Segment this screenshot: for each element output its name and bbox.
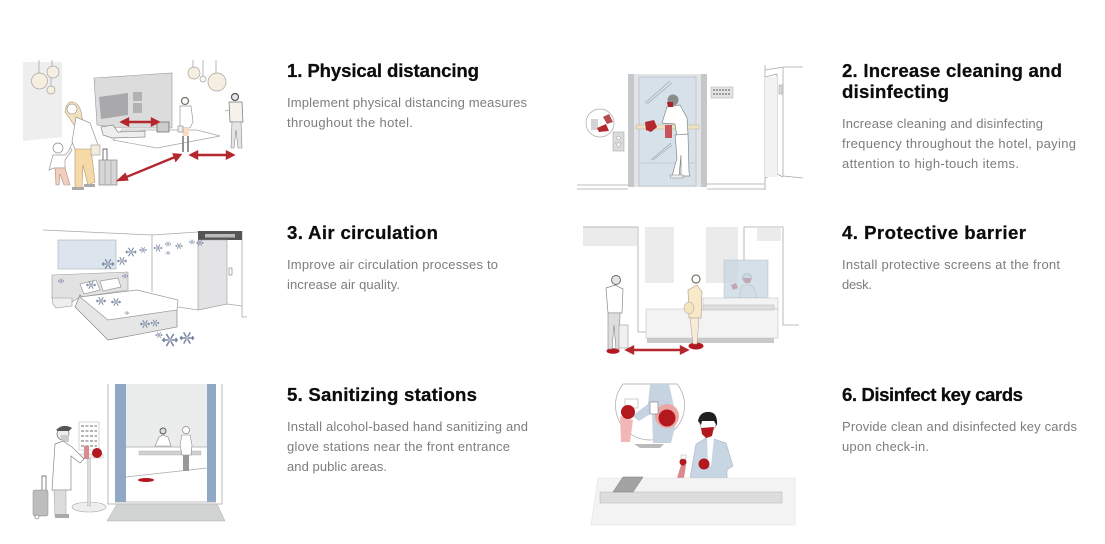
heading: 1. Physical distancing bbox=[287, 60, 479, 81]
sanitizer stand bbox=[72, 422, 106, 512]
cleaner figure bbox=[645, 94, 690, 178]
description: and public areas. bbox=[287, 459, 387, 474]
key card reader bbox=[613, 477, 643, 492]
magnifier circle: hands and key card bbox=[616, 384, 684, 448]
description bbox=[842, 257, 1060, 292]
red distance arrow bbox=[627, 347, 687, 353]
man with suitcase on marker bbox=[606, 276, 628, 354]
panel: disinfect key cards bbox=[591, 384, 1078, 525]
panel: air circulation bbox=[43, 222, 498, 346]
description bbox=[842, 116, 1076, 171]
illustration: man disinfecting key card at counter bbox=[591, 384, 795, 525]
description: upon check-in. bbox=[842, 439, 929, 454]
description: Install protective screens at the front bbox=[842, 257, 1060, 272]
panel: protective barrier bbox=[583, 222, 1060, 354]
panel: sanitizing stations bbox=[33, 384, 528, 521]
illustration: front desk with protective screen bbox=[583, 227, 799, 354]
heading: 5. Sanitizing stations bbox=[287, 384, 477, 405]
description bbox=[287, 257, 498, 292]
description: attention to high-touch items. bbox=[842, 156, 1019, 171]
elevator sign bbox=[711, 87, 733, 98]
red distance arrows bbox=[119, 119, 233, 180]
staff and guest in lobby bbox=[139, 426, 201, 471]
description bbox=[842, 419, 1078, 454]
magnifier circle: door buttons bbox=[586, 109, 614, 137]
clerk behind screen bbox=[731, 274, 757, 298]
description: increase air quality. bbox=[287, 277, 400, 292]
illustration: elevator door cleaning bbox=[577, 65, 803, 190]
illustration: hotel lobby with guests standing apart bbox=[23, 60, 243, 190]
heading: 2. Increase cleaning and bbox=[842, 60, 1062, 81]
doctor with mask bbox=[52, 426, 84, 518]
description: Increase cleaning and disinfecting bbox=[842, 116, 1043, 131]
woman guest bbox=[178, 98, 193, 152]
heading: disinfecting bbox=[842, 81, 949, 102]
suitcase bbox=[99, 149, 117, 185]
description: throughout the hotel. bbox=[287, 115, 413, 130]
heading bbox=[842, 60, 1062, 102]
description: glove stations near the front entrance bbox=[287, 439, 510, 454]
panel: physical distancing bbox=[23, 60, 528, 190]
man with mask bbox=[677, 412, 733, 478]
panel: increase cleaning and disinfecting bbox=[577, 60, 1076, 190]
woman on marker bbox=[684, 275, 704, 350]
description: desk. bbox=[842, 277, 872, 292]
description bbox=[287, 95, 528, 130]
description: frequency throughout the hotel, paying bbox=[842, 136, 1076, 151]
heading: 6. Disinfect key cards bbox=[842, 384, 1023, 405]
description: Improve air circulation processes to bbox=[287, 257, 498, 272]
man in suit bbox=[225, 94, 243, 148]
snowflakes of clean air bbox=[58, 240, 203, 346]
description: Implement physical distancing measures bbox=[287, 95, 528, 110]
description bbox=[287, 419, 528, 474]
description: Install alcohol-based hand sanitizing and bbox=[287, 419, 528, 434]
illustration: sanitizer station near entrance bbox=[33, 384, 225, 521]
suitcase bbox=[33, 476, 48, 519]
heading: 3. Air circulation bbox=[287, 222, 438, 243]
heading: 4. Protective barrier bbox=[842, 222, 1026, 243]
illustration: hotel room with air flow bbox=[43, 230, 247, 346]
mother and child bbox=[49, 102, 100, 190]
description: Provide clean and disinfected key cards bbox=[842, 419, 1078, 434]
elevator call button bbox=[613, 132, 624, 151]
check-in counter bbox=[591, 478, 795, 525]
